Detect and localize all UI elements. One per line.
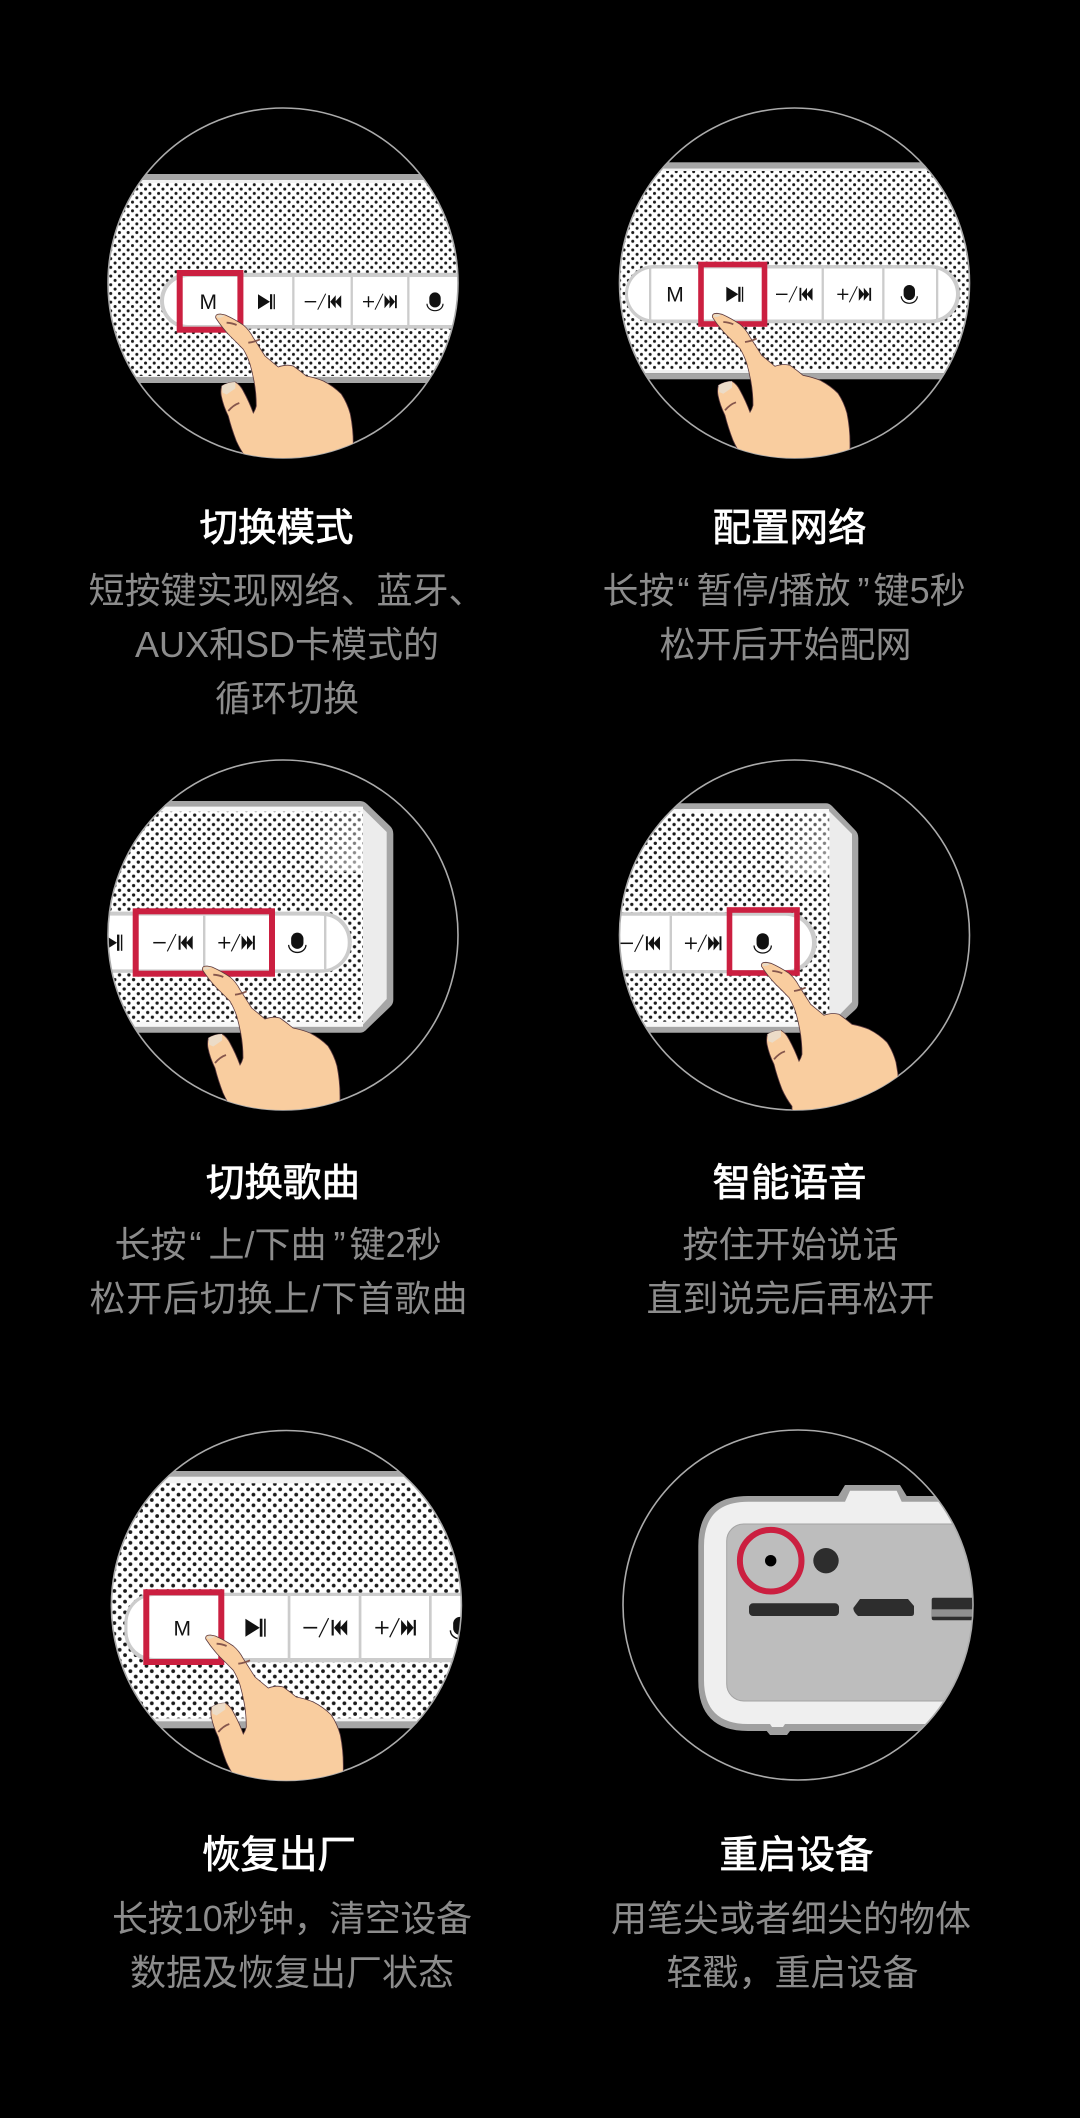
power port — [932, 1598, 972, 1620]
description: 长按“上/下曲”键2秒 — [114, 1224, 442, 1265]
description — [90, 1224, 468, 1319]
circle outline — [108, 760, 458, 1110]
circle outline — [108, 108, 458, 458]
description: 轻戳，重启设备 — [666, 1952, 919, 1993]
description — [611, 1898, 971, 1993]
hand pressing — [712, 312, 850, 458]
description: 数据及恢复出厂状态 — [130, 1952, 454, 1993]
description: 松开后切换上/下首歌曲 — [90, 1278, 468, 1319]
speaker front — [620, 803, 858, 1033]
description — [602, 570, 966, 665]
heading: 恢复出厂 — [202, 1834, 356, 1877]
panel: configure network — [602, 108, 980, 665]
illustration: speaker back panel with reset hole — [622, 1429, 974, 1781]
description: 直到说完后再松开 — [646, 1278, 935, 1319]
sd card slot — [749, 1603, 839, 1616]
hand pressing — [205, 1634, 344, 1780]
illustration: speaker with previous and next buttons pressed — [107, 759, 459, 1111]
illustration: speaker with play button pressed — [618, 107, 970, 459]
hand pressing — [202, 966, 340, 1110]
usb port — [853, 1599, 914, 1616]
description: 短按键实现网络、蓝牙、 — [88, 570, 485, 611]
panel: switch songs — [90, 759, 464, 1314]
speaker front — [610, 162, 980, 379]
highlight box — [136, 911, 272, 974]
speaker front: M — [174, 1617, 191, 1640]
illustration: speaker with mic button pressed — [618, 759, 970, 1111]
panel: factory reset — [110, 1430, 471, 1988]
heading: 配置网络 — [712, 507, 867, 550]
speaker front: M — [666, 284, 684, 306]
circle outline — [620, 108, 970, 458]
speaker front — [108, 174, 458, 383]
description: AUX和SD卡模式的 — [135, 624, 439, 665]
aux port — [813, 1548, 839, 1573]
description — [646, 1224, 935, 1319]
panel: voice assistant — [618, 759, 970, 1314]
panel: switch mode — [88, 108, 494, 719]
description: 松开后开始配网 — [660, 624, 912, 665]
circle outline — [623, 1430, 973, 1780]
hand pressing — [760, 962, 898, 1110]
description — [112, 1898, 472, 1993]
circle outline — [620, 760, 970, 1110]
heading: 切换歌曲 — [206, 1162, 360, 1205]
highlight box — [180, 273, 240, 330]
speaker front: M — [200, 291, 217, 314]
description: 长按“暂停/播放”键5秒 — [602, 570, 966, 611]
illustration: speaker with M button long-press — [110, 1430, 462, 1782]
heading: 智能语音 — [712, 1162, 867, 1205]
speaker back — [698, 1485, 972, 1735]
hand pressing — [215, 314, 354, 458]
highlight box — [730, 910, 797, 973]
circle outline — [111, 1430, 461, 1780]
reset hole with red ring — [740, 1530, 802, 1591]
speaker front — [108, 801, 394, 1033]
heading: 切换模式 — [200, 507, 354, 550]
description: 用笔尖或者细尖的物体 — [611, 1898, 971, 1939]
description: 长按10秒钟，清空设备 — [112, 1898, 472, 1939]
description: 按住开始说话 — [682, 1224, 899, 1265]
illustration: speaker with M button pressed — [107, 107, 459, 459]
description: 循环切换 — [215, 678, 359, 719]
description — [88, 570, 485, 719]
speaker front — [112, 1471, 461, 1728]
heading: 重启设备 — [720, 1834, 874, 1877]
panel: restart device — [612, 1429, 974, 1990]
infographic canvas — [90, 107, 974, 1990]
highlight box — [146, 1592, 221, 1662]
highlight box — [701, 264, 764, 324]
